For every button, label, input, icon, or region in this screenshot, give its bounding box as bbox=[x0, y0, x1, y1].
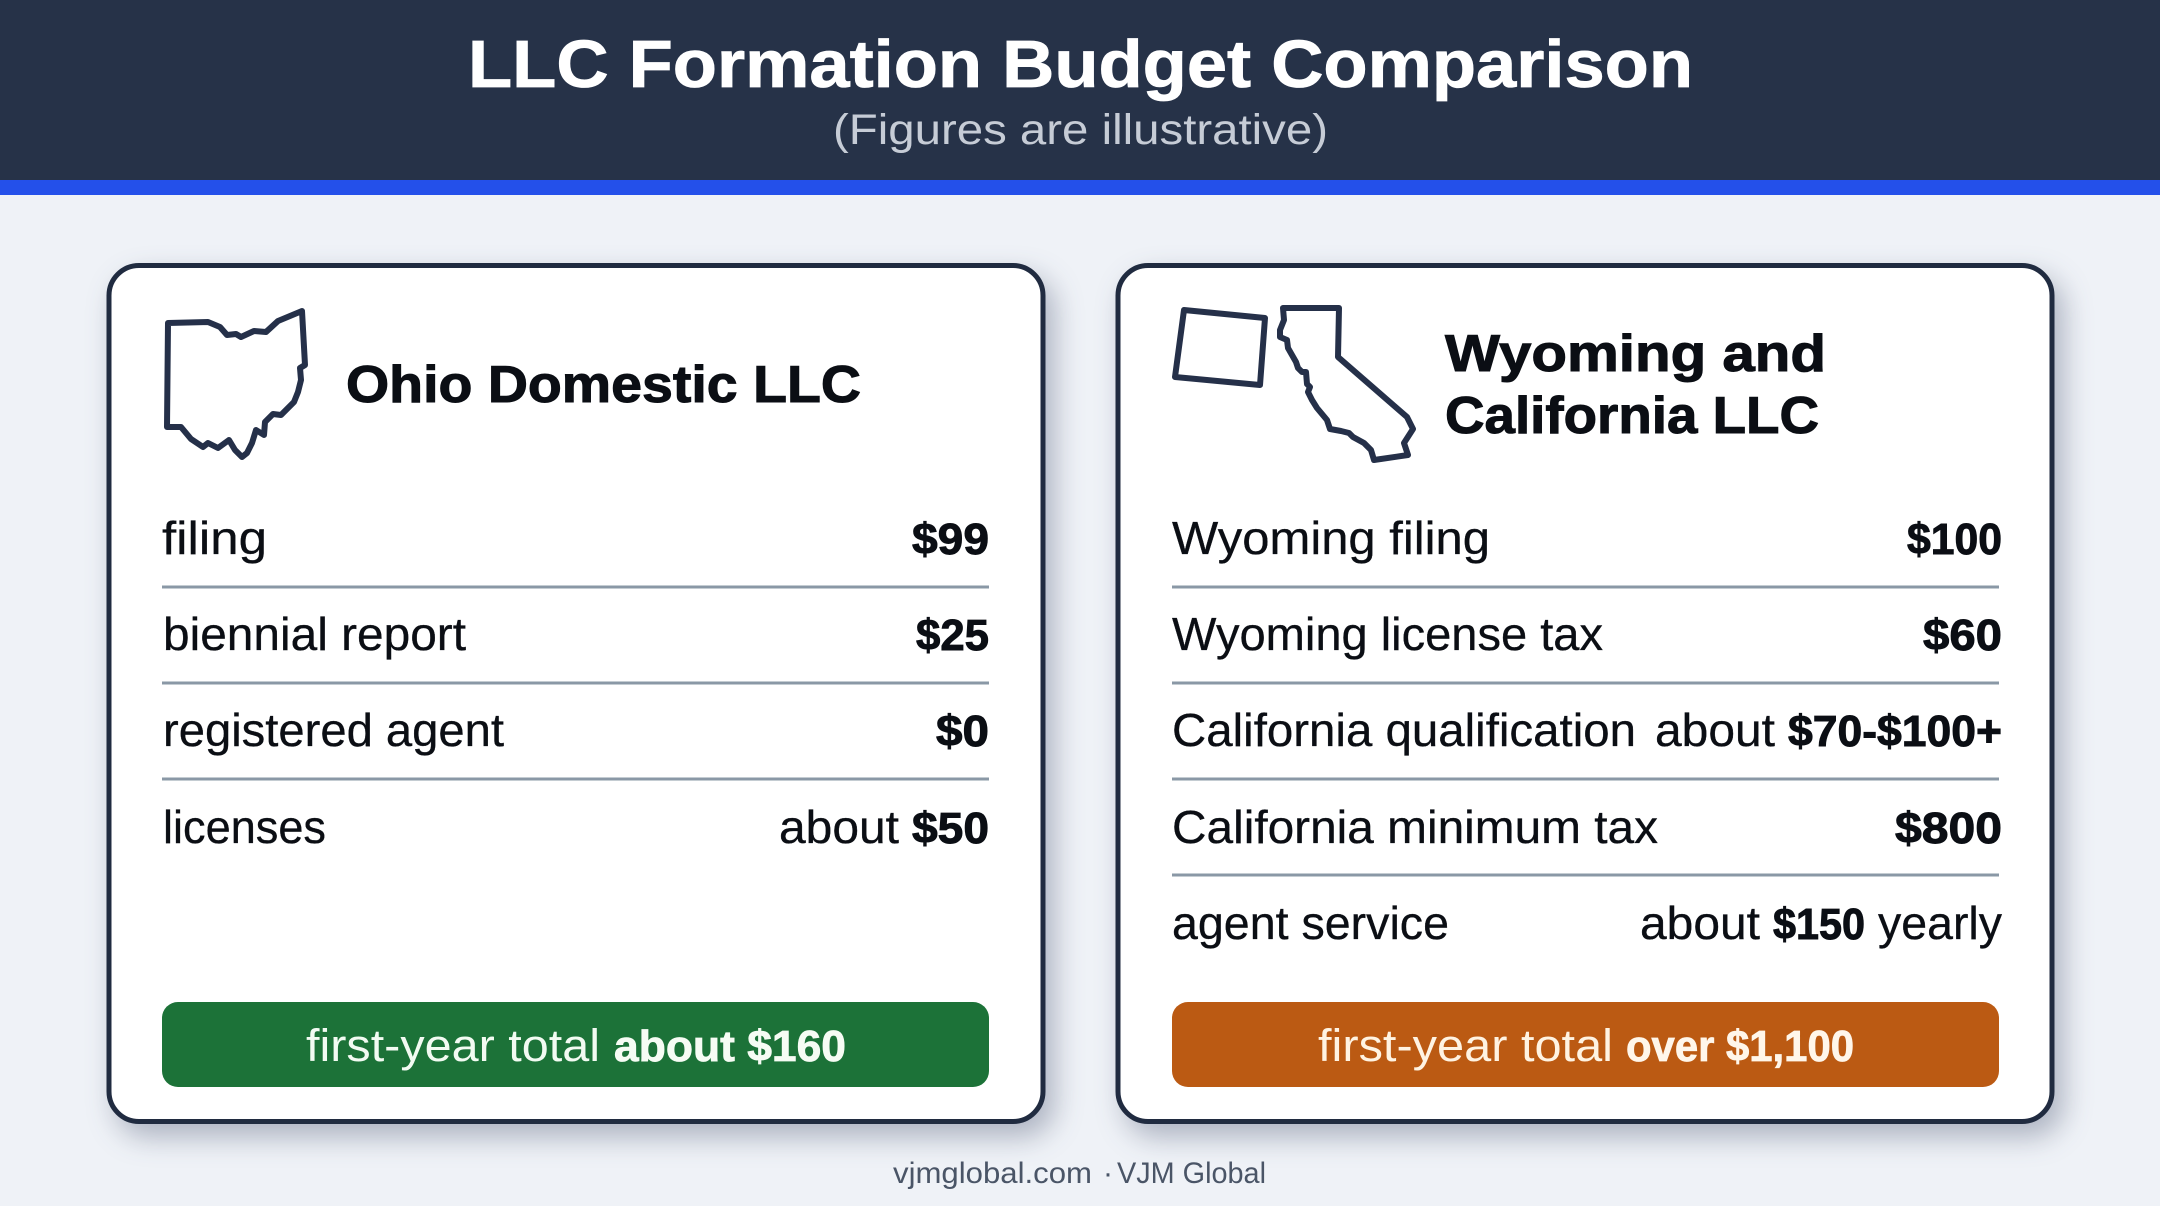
row: filing bbox=[162, 512, 989, 564]
total bar: about $160 bbox=[162, 1002, 989, 1087]
header band bbox=[0, 0, 2160, 195]
row: agent service bbox=[1172, 897, 2002, 949]
row: licenses: about bbox=[779, 801, 899, 853]
row: licenses: $50 bbox=[912, 804, 989, 853]
row: Wyoming license tax bbox=[1172, 608, 2002, 660]
row: biennial report: $25 bbox=[916, 611, 989, 660]
row: California qualification: California qualification bbox=[1172, 704, 1636, 756]
row: registered agent: registered agent bbox=[163, 704, 504, 756]
row: California qualification: about bbox=[1655, 704, 1775, 756]
footer source: · bbox=[1103, 1157, 1113, 1190]
row: licenses: licenses bbox=[163, 801, 326, 853]
total bar: over $1,100 bbox=[1172, 1002, 1999, 1087]
footer source: vjmglobal.com bbox=[893, 1157, 1092, 1190]
row: California minimum tax: California minimum tax bbox=[1172, 801, 1658, 853]
footer source bbox=[893, 1157, 1266, 1190]
row: Wyoming license tax: Wyoming license tax bbox=[1172, 608, 1603, 660]
row: Wyoming filing bbox=[1172, 512, 2002, 564]
row: biennial report bbox=[163, 608, 989, 660]
row: biennial report: biennial report bbox=[163, 608, 466, 660]
panel: Ohio Domestic LLC bbox=[109, 266, 1043, 1122]
heading: Wyoming and California LLC: California LLC bbox=[1445, 387, 1819, 445]
icon: California outline bbox=[1280, 308, 1413, 460]
row: registered agent bbox=[163, 704, 989, 756]
heading: Ohio Domestic LLC: Ohio Domestic LLC bbox=[346, 356, 861, 414]
panel: Wyoming and California LLC bbox=[1118, 266, 2052, 1122]
footer source: VJM Global bbox=[1117, 1157, 1266, 1190]
row: California minimum tax bbox=[1172, 801, 2002, 853]
row: agent service: about bbox=[1640, 897, 1760, 949]
subtitle: (Figures are illustrative) bbox=[833, 106, 1328, 154]
row: California qualification bbox=[1172, 704, 2002, 756]
total bar: over $1,100: first-year total bbox=[1318, 1020, 1613, 1071]
total bar: about $160: about $160 bbox=[614, 1022, 846, 1071]
row: registered agent: $0 bbox=[936, 707, 989, 756]
total bar: over $1,100: over $1,100 bbox=[1626, 1022, 1854, 1071]
icon: Ohio outline bbox=[167, 311, 305, 457]
row: Wyoming filing: $100 bbox=[1907, 515, 2002, 564]
heading: Wyoming and California LLC bbox=[1445, 325, 1826, 445]
row: agent service: yearly bbox=[1878, 897, 2002, 949]
row: agent service: agent service bbox=[1172, 897, 1449, 949]
heading: Wyoming and California LLC: Wyoming and bbox=[1445, 325, 1826, 383]
row: licenses bbox=[163, 801, 989, 853]
row: filing: filing bbox=[162, 512, 267, 564]
total bar: about $160: first-year total bbox=[306, 1020, 600, 1071]
icon: Wyoming outline bbox=[1175, 310, 1265, 385]
row: Wyoming filing: Wyoming filing bbox=[1172, 512, 1490, 564]
row: California minimum tax: $800 bbox=[1895, 804, 2002, 853]
title: LLC Formation Budget Comparison bbox=[468, 27, 1693, 102]
row: filing: $99 bbox=[912, 515, 989, 564]
row: California qualification: $70-$100+ bbox=[1788, 707, 2002, 756]
row: agent service: $150 bbox=[1773, 900, 1865, 949]
row: Wyoming license tax: $60 bbox=[1923, 611, 2002, 660]
